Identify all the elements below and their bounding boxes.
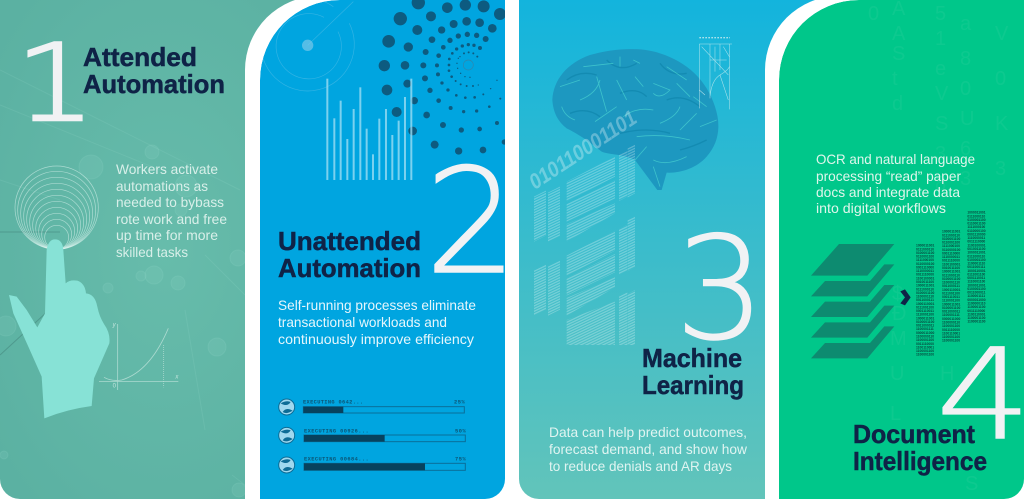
text: document intelligence description (816, 151, 975, 216)
faint matrix characters: 8 (935, 173, 946, 195)
binary column 2: 0000011000 (942, 317, 960, 321)
faint matrix characters: 3 (935, 143, 946, 165)
icon: concentric rings (15, 166, 98, 249)
faint matrix characters: Đ (892, 303, 906, 325)
numeral 1: 1 (15, 21, 96, 145)
icon: pointing hand (9, 239, 110, 418)
heading: machine learning: Learning (642, 370, 744, 400)
faint matrix characters: S (935, 113, 948, 135)
binary column 2: 0111000110 (942, 233, 960, 237)
faint matrix characters: A (892, 23, 906, 45)
progress row 50%: 50% (455, 428, 466, 434)
heading: unattended automation (278, 226, 421, 283)
text: unattended description: Self-running processes eliminate (278, 297, 476, 313)
faint matrix characters: $ (892, 283, 903, 305)
binary column 3: 0011110000 (967, 240, 985, 244)
text: machine learning description (549, 424, 748, 474)
binary column 2: 1111000100 (942, 244, 960, 248)
binary column 3: 0011000111 (967, 265, 985, 269)
binary column 3: 1100001100 (967, 320, 986, 324)
binary column 1: 0100001100 (916, 251, 934, 255)
text: machine learning description: forecast demand, and show how (549, 441, 748, 457)
binary column 1: 0011110000 (916, 273, 934, 277)
binary column 1: 1000011001 (916, 284, 934, 288)
text: unattended description (278, 297, 476, 347)
panel: white frame for card 4 (765, 0, 1024, 499)
binary column 1: 1110001100 (916, 313, 934, 317)
panel: white frame for card 2 (245, 0, 519, 499)
binary column 1: 1100000110 (916, 334, 934, 338)
binary column 1: 1000011001 (916, 244, 934, 248)
progress row 75%: EXECUTING 00684... (304, 456, 369, 462)
faint matrix characters: M (890, 328, 907, 350)
heading: attended automation (83, 42, 225, 99)
binary column 2: 1100001100 (942, 339, 960, 343)
binary column 3: 0110001100 (967, 222, 986, 226)
binary column 1: 1100001110 (916, 295, 934, 299)
binary column 3: 0001110000 (967, 232, 986, 236)
binary column 1: 0001110000 (916, 265, 934, 269)
progress row 25%: EXECUTING 0642... (303, 400, 363, 406)
binary column 2: 0100001100 (942, 237, 960, 241)
binary column 3: 0100001100 (967, 287, 986, 291)
progress row 25% (279, 399, 465, 415)
binary column 3: 1000011001 (967, 283, 986, 287)
binary column 1: 0011000111 (916, 298, 934, 302)
faint matrix characters: V (935, 83, 949, 105)
binary column 1: 1111000100 (916, 258, 934, 262)
faint matrix characters: a (960, 13, 972, 35)
numeral 2: 2 (425, 138, 517, 307)
binary column 3: 1100001100 (967, 316, 986, 320)
binary column 2: 0111000110 (942, 273, 960, 277)
progress row 75%: 75% (455, 456, 466, 462)
faint matrix characters: 0 (995, 68, 1006, 90)
binary column 3: 1100000110 (967, 301, 986, 305)
numeral 3: 3 (675, 207, 765, 372)
heading: machine learning (642, 343, 744, 400)
text: attended description (116, 161, 227, 260)
background bubbles and lines (0, 70, 246, 497)
progress row 50%: EXECUTING 00926... (304, 428, 369, 434)
faint matrix characters: S (892, 43, 905, 65)
binary column 2: 0001110011 (942, 295, 960, 299)
panel: machine learning (519, 0, 815, 499)
binary column 2: 0011000111 (942, 284, 960, 288)
text: attended description: up time for more (116, 227, 218, 243)
binary column 1: 0001110011 (916, 309, 934, 313)
radar graphic (261, 0, 354, 91)
progress list (279, 399, 466, 473)
binary column 2: 1000011001 (942, 230, 960, 234)
binary column 2: 1110001100 (942, 299, 960, 303)
text: attended description: Workers activate (116, 161, 218, 177)
faint matrix characters: U (890, 363, 904, 385)
binary column 3: 0100001100 (967, 218, 986, 222)
binary column 1: 1110000011 (916, 269, 934, 273)
binary column 1: 0111001100 (916, 305, 934, 309)
binary column 3: 0111000110 (967, 254, 985, 258)
faint matrix characters: H (940, 363, 954, 385)
chart: function graph (99, 323, 179, 390)
binary column 3: 0111000110 (967, 214, 985, 218)
binary column 1: 1100001111 (916, 327, 934, 331)
faint matrix characters: L (890, 403, 901, 425)
binary column 3: 0001110011 (967, 276, 985, 280)
faint matrix characters: d (892, 93, 903, 115)
chart: function graph: 0 (113, 384, 117, 390)
binary column 1: 0000011000 (916, 331, 934, 335)
text: unattended description: continuously improve efficiency (278, 331, 474, 347)
binary column 3: 0011000011 (967, 291, 986, 295)
text: document intelligence description: OCR and natural language (816, 151, 975, 167)
icon: document stack (811, 244, 894, 358)
binary column 3: 0000011000 (967, 298, 986, 302)
faint matrix characters: 5 (935, 3, 946, 25)
binary column 2: 0100001100 (942, 306, 960, 310)
icon: brain (552, 49, 718, 190)
faint matrix characters: 0 (868, 3, 879, 25)
binary column 1: 0100001100 (916, 291, 934, 295)
text: machine learning description: to reduce denials and AR days (549, 458, 732, 474)
binary column 2: 1000011001 (942, 302, 960, 306)
heading: attended automation: Attended (83, 42, 197, 72)
binary column 3: 0100001100 (967, 258, 986, 262)
progress row 50% (279, 427, 466, 443)
binary column 3: 0111001100 (967, 272, 985, 276)
binary column 3: 1110001100 (967, 280, 985, 284)
binary column 2: 0011110000 (942, 259, 960, 263)
binary column 1: 1100001100 (916, 353, 934, 357)
binary column 1: 0010011100 (916, 280, 934, 284)
binary column 2: 1100000110 (942, 320, 960, 324)
faint matrix characters: K (995, 113, 1009, 135)
binary column 1: 0100001100 (916, 320, 934, 324)
binary column 1: 0110001100 (916, 255, 934, 259)
chart: function graph: y (112, 323, 117, 329)
binary column 2: 1000011001 (942, 270, 960, 274)
binary column 2: 0110001100 (942, 241, 960, 245)
heading: document intelligence: Intelligence (853, 446, 987, 476)
binary text: 010110001101 (525, 106, 641, 194)
bar chart (326, 79, 412, 180)
binary column 2: 1100001100 (942, 324, 960, 328)
binary column 3: 1110000011 (967, 236, 985, 240)
binary column 2: 0011110000 (942, 328, 960, 332)
binary column 1: 0111000110 (916, 287, 934, 291)
binary column 3: 1111000100 (967, 225, 985, 229)
progress row 25%: 25% (454, 400, 465, 406)
faint matrix characters (868, 0, 1009, 495)
progress row 75% (279, 456, 466, 473)
faint matrix characters: V (995, 23, 1009, 45)
binary column 3: 1100001110 (967, 262, 985, 266)
panel: document intelligence (779, 0, 1024, 499)
binary column 1: 1100110001 (916, 345, 934, 349)
chart: small data table (699, 38, 732, 109)
text: document intelligence description: into digital workflows (816, 200, 946, 216)
dotted spiral (379, 0, 507, 155)
text: document intelligence description: processing “read” paper (816, 168, 961, 184)
heading: document intelligence (853, 419, 987, 476)
binary column 2: 0011000011 (942, 310, 960, 314)
faint matrix characters: 0 (960, 78, 971, 100)
heading: machine learning: Machine (642, 343, 742, 373)
icon: arrow chevron (900, 289, 911, 305)
heading: unattended automation: Unattended (278, 226, 421, 256)
binary column 1: 0011000011 (916, 324, 934, 328)
binary column 3: 0110000100 (967, 229, 986, 233)
heading: unattended automation: Automation (278, 253, 421, 283)
faint matrix characters: 3 (995, 158, 1006, 180)
binary column 2: 1100110001 (942, 331, 960, 335)
binary column 3: 1100001100 (967, 305, 986, 309)
faint matrix characters: U (890, 453, 904, 475)
binary column 3: 0010011100 (967, 247, 986, 251)
data table pattern (534, 144, 635, 345)
faint matrix characters: t (892, 68, 898, 90)
binary column 2: 1100001110 (942, 281, 960, 285)
binary column 1: 1100100001 (916, 276, 934, 280)
faint matrix characters: 1 (935, 28, 946, 50)
binary columns (916, 211, 986, 357)
faint matrix characters: U (960, 108, 974, 130)
binary column 3: 1100110001 (967, 312, 986, 316)
binary column 2: 1100001100 (942, 335, 960, 339)
text: attended description: rote work and free (116, 211, 227, 227)
binary column 3: 0011110000 (967, 309, 985, 313)
chart: function graph: x (174, 375, 179, 381)
binary column 2: 1100100001 (942, 262, 960, 266)
heading: document intelligence: Document (853, 419, 975, 449)
text: unattended description: transactional workloads and (278, 314, 447, 330)
text: attended description: automations as (116, 178, 208, 194)
faint matrix characters: S (965, 473, 978, 495)
text: attended description: skilled tasks (116, 244, 188, 260)
binary column 3: 1100001111 (967, 294, 985, 298)
binary column 2: 0100001100 (942, 277, 960, 281)
binary column 3: 1100100001 (967, 243, 986, 247)
binary column 2: 0010011100 (942, 266, 960, 270)
binary column 1: 1100001100 (916, 338, 934, 342)
text: attended description: needed to bybass (116, 194, 224, 210)
panel: attended automation (0, 0, 330, 499)
binary column 2: 1110000011 (942, 255, 960, 259)
faint matrix characters: 8 (960, 48, 971, 70)
binary column 2: 1000110001 (942, 288, 960, 292)
heading: attended automation: Automation (83, 69, 225, 99)
binary column 1: 1000110001 (916, 302, 934, 306)
binary column 2: 1100001111 (942, 313, 960, 317)
text: document intelligence description: docs and integrate data (816, 184, 960, 200)
binary column 3: 1000011001 (967, 211, 986, 215)
binary column 1: 1100001100 (916, 349, 934, 353)
binary column 1: 0011110000 (916, 342, 934, 346)
faint matrix characters: 3 (960, 168, 971, 190)
binary column 2: 0110000100 (942, 248, 960, 252)
binary column 1: 0110000100 (916, 262, 934, 266)
binary column 1: 1000011001 (916, 316, 934, 320)
binary column 3: 1000011001 (967, 251, 986, 255)
faint matrix characters: 6 (960, 138, 971, 160)
binary column 2: 0001110000 (942, 251, 960, 255)
text: machine learning description: Data can help predict outcomes, (549, 424, 747, 440)
panel: unattended automation (260, 0, 517, 499)
binary column 3: 1000110001 (967, 269, 986, 273)
faint matrix characters: e (935, 58, 946, 80)
binary column 2: 0111001100 (942, 291, 960, 295)
binary column 1: 0111000110 (916, 247, 934, 251)
